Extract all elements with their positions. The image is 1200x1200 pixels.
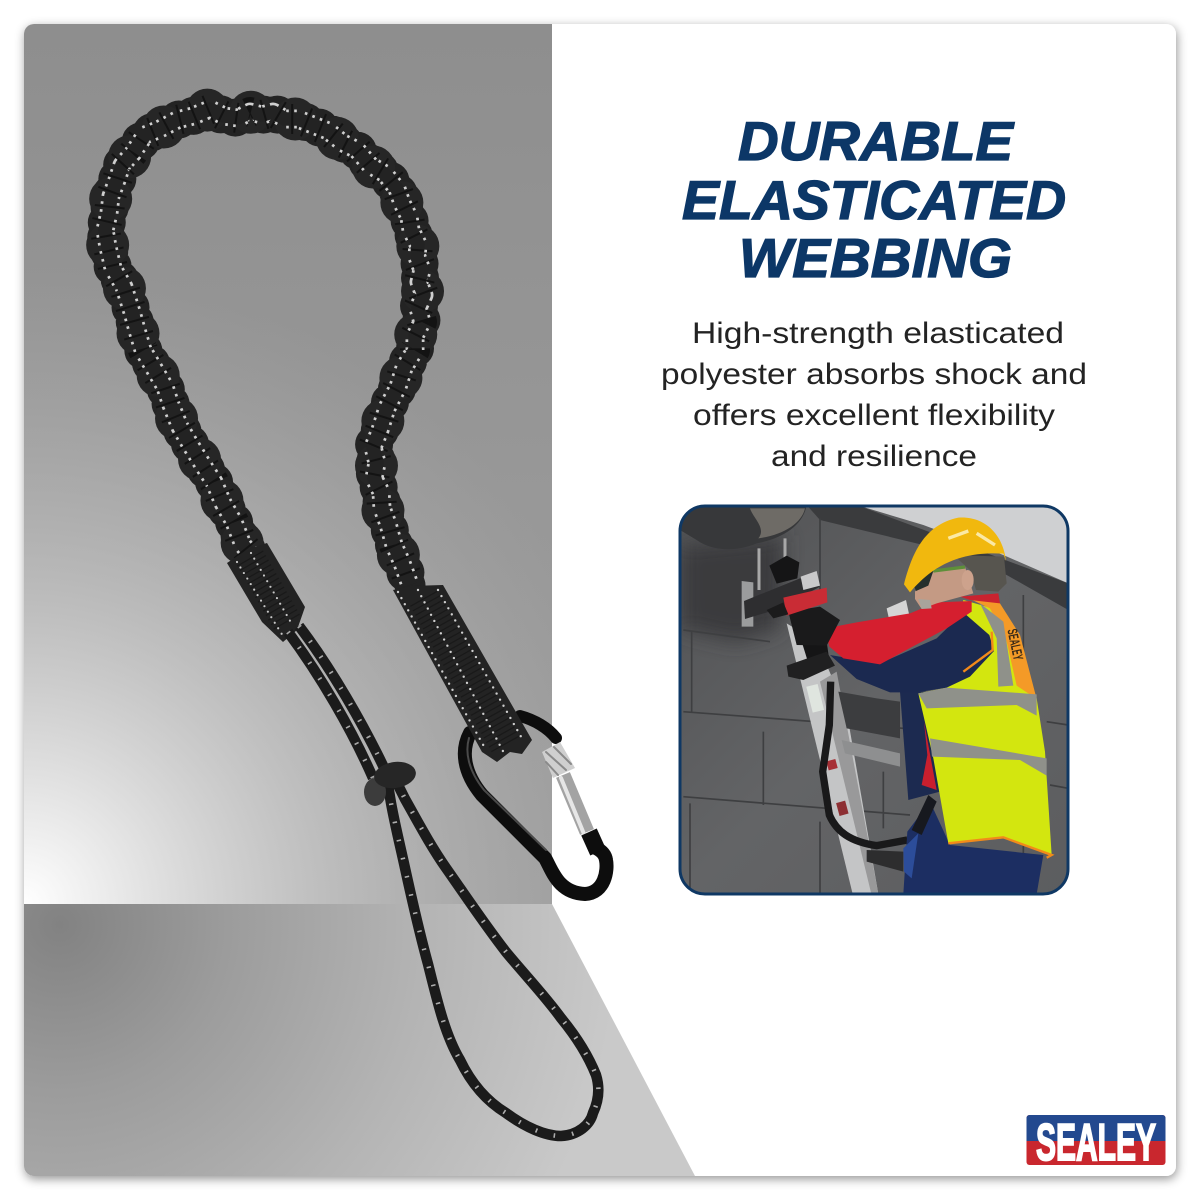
black belt pouch	[912, 795, 937, 835]
blue strap	[903, 833, 918, 878]
worker	[767, 518, 1052, 894]
hair and strap	[953, 555, 1007, 592]
elasticated webbing	[105, 109, 424, 585]
description text: polyester absorbs shock and	[661, 358, 1087, 391]
vest orange panel	[970, 599, 1037, 699]
vest text: SEALEY	[1004, 627, 1027, 662]
title: ELASTICATED	[682, 169, 1066, 231]
vest reflective bands	[918, 603, 1047, 776]
tether lanyard	[823, 682, 907, 846]
safety glasses	[912, 567, 965, 591]
torso	[900, 692, 940, 800]
red sleeve	[827, 601, 972, 664]
Sealey logo	[1026, 1114, 1166, 1172]
description text	[661, 317, 1087, 473]
foil duct highlight	[750, 508, 805, 538]
hard hat highlight	[948, 531, 995, 545]
hi-vis vest	[918, 600, 1052, 855]
ladder	[787, 600, 911, 894]
logo blue band	[1026, 1115, 1166, 1141]
photo: worker on ladder using tethered tool	[679, 505, 1068, 894]
grey studio backdrop	[24, 24, 695, 1176]
title: WEBBING	[739, 227, 1012, 289]
vest orange trim	[948, 632, 1052, 858]
backdrop wall	[24, 24, 552, 904]
description text: offers excellent flexibility	[693, 399, 1055, 432]
navy sleeve	[830, 612, 994, 692]
photo border	[680, 506, 1068, 894]
duct	[680, 505, 807, 549]
beard	[918, 599, 932, 609]
title	[682, 110, 1066, 289]
left stitched sleeve	[227, 543, 305, 642]
right stitched sleeve	[393, 585, 532, 762]
hard hat	[904, 518, 1006, 592]
title: DURABLE	[738, 110, 1015, 172]
ear	[962, 570, 974, 590]
drill dark grip	[767, 602, 788, 618]
black glove	[788, 607, 840, 646]
carabiner	[465, 716, 607, 894]
trousers	[903, 802, 1043, 894]
tool handle	[802, 644, 828, 658]
red side panel	[922, 722, 937, 790]
red collar	[960, 593, 1000, 603]
backdrop floor	[24, 904, 695, 1176]
description text: and resilience	[771, 440, 977, 473]
product: elasticated lanyard	[105, 109, 607, 1136]
photo wall	[679, 505, 1068, 894]
cord slider toggle	[364, 759, 418, 806]
face	[915, 567, 973, 609]
drill battery	[787, 652, 835, 680]
logo background	[1026, 1115, 1166, 1165]
shock cord loop	[288, 626, 598, 1136]
description text: High-strength elasticated	[692, 317, 1064, 350]
wall bracket	[742, 538, 820, 627]
red drill body	[783, 588, 827, 616]
